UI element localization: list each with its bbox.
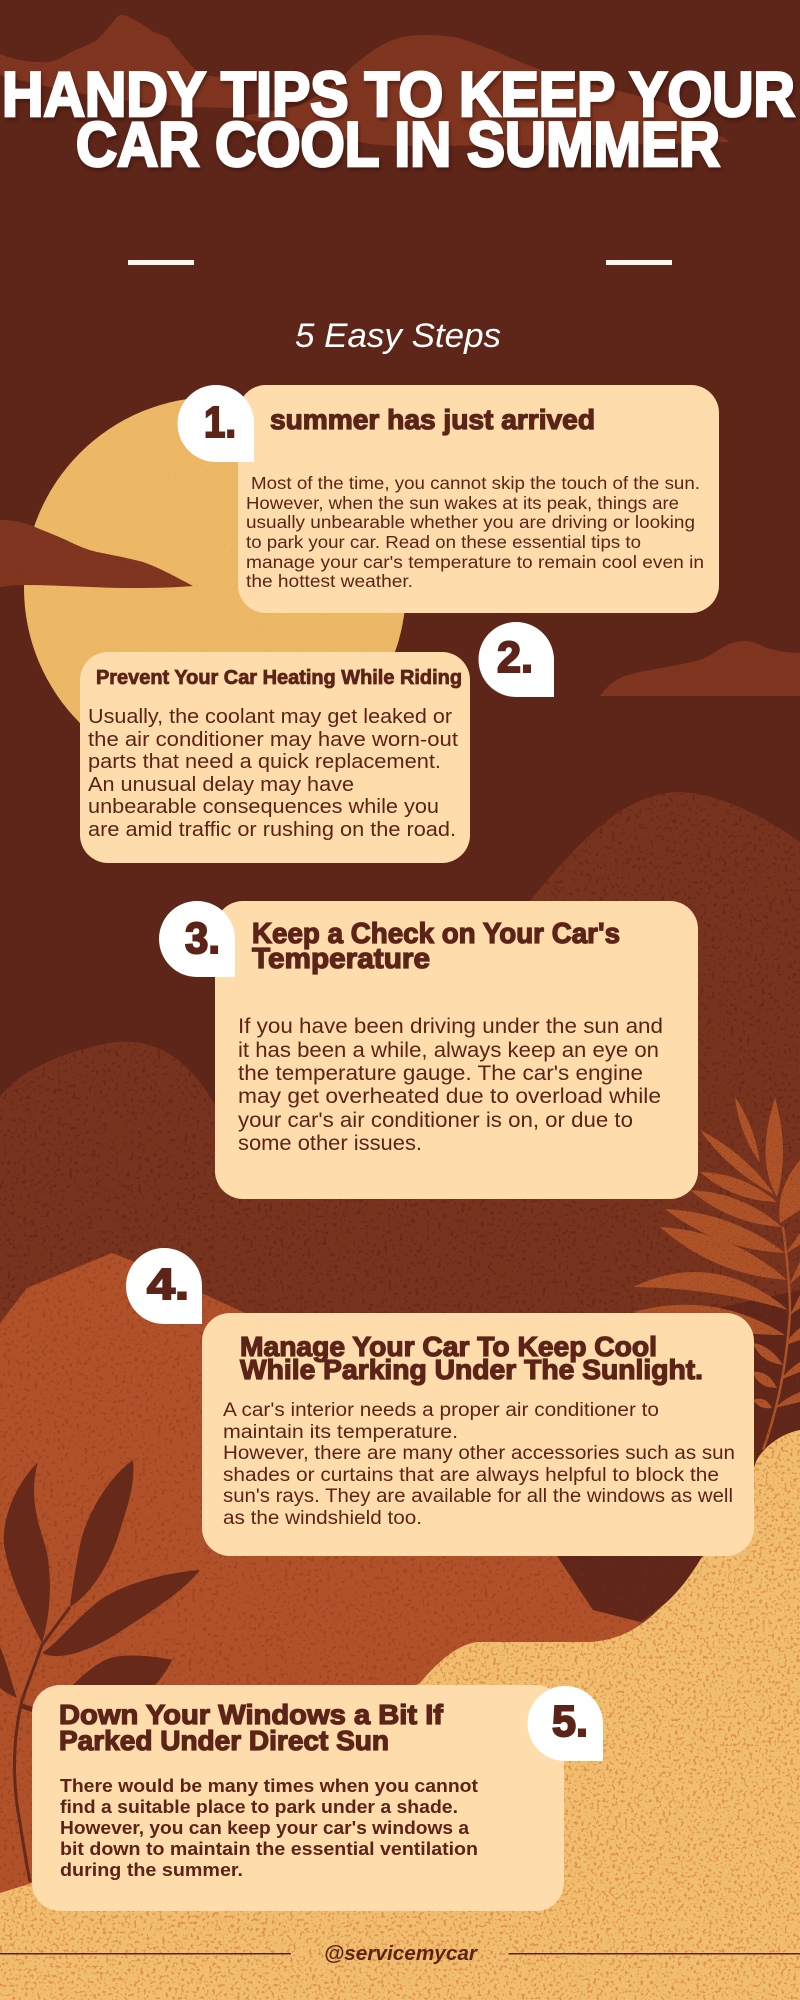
footer handle: @servicemycar — [324, 1943, 478, 1965]
body text 1: usually unbearable whether you are driving or looking — [246, 512, 695, 532]
body text 1: Most of the time, you cannot skip the touch of the sun. — [251, 473, 700, 493]
body text 4: as the windshield too. — [223, 1508, 422, 1529]
number 4: 4. — [147, 1260, 189, 1309]
sun — [24, 397, 406, 779]
body text 2: Usually, the coolant may get leaked or — [88, 706, 452, 728]
orange hill — [0, 1253, 700, 1900]
badge 5 — [528, 1686, 603, 1761]
heading 5: Parked Under Direct Sun — [59, 1725, 389, 1756]
heading 3: Temperature — [252, 943, 430, 975]
heading 5 — [59, 1699, 444, 1756]
card — [215, 901, 698, 1199]
subtitle: 5 Easy Steps — [295, 317, 501, 355]
body text 5: There would be many times when you cannot — [60, 1776, 478, 1796]
title divider right — [606, 260, 672, 265]
body text 5 — [60, 1776, 478, 1880]
heading 4: Manage Your Car To Keep Cool — [240, 1331, 657, 1362]
number 3: 3. — [185, 914, 220, 963]
sand wave — [0, 1430, 800, 2000]
body text 3: may get overheated due to overload while — [238, 1085, 661, 1108]
heading 4: While Parking Under The Sunlight. — [240, 1354, 703, 1385]
branch with dark leaves — [0, 1460, 200, 1882]
card — [238, 385, 719, 613]
mid hills — [0, 792, 800, 1700]
left mountain over sun — [0, 520, 193, 588]
badge 1 — [178, 385, 254, 462]
body text 3 — [238, 1015, 663, 1155]
number 5: 5. — [552, 1697, 588, 1746]
body text 2: the air conditioner may have worn-out — [88, 729, 458, 751]
badge 3 — [159, 901, 235, 977]
dark hill behind palm — [500, 1290, 800, 1622]
body text 5: However, you can keep your car's windows a — [60, 1818, 470, 1838]
card — [32, 1685, 564, 1911]
body text 5: bit down to maintain the essential ventilation — [60, 1839, 478, 1859]
body text 4: maintain its temperature. — [223, 1422, 458, 1443]
body text 1: However, when the sun wakes at its peak, things are — [246, 493, 679, 513]
heading 4 — [240, 1331, 703, 1385]
body text 4: However, there are many other accessories such as sun — [223, 1443, 735, 1464]
right mountain — [600, 641, 800, 696]
body text 4: A car's interior needs a proper air conditioner to — [223, 1400, 659, 1421]
body text 2: An unusual delay may have — [88, 774, 354, 796]
body text 1: the hottest weather. — [246, 571, 413, 591]
title — [2, 60, 795, 180]
body text 5: during the summer. — [60, 1860, 243, 1880]
number 1: 1. — [204, 398, 236, 447]
palm leaf — [633, 1097, 800, 1450]
heading 3 — [252, 918, 620, 975]
body text 1 — [246, 473, 704, 591]
title: CAR COOL IN SUMMER — [76, 110, 720, 180]
body text 3: your car's air conditioner is on, or due to — [238, 1109, 633, 1132]
body text 3: some other issues. — [238, 1132, 422, 1155]
card — [202, 1313, 754, 1556]
body text 5: find a suitable place to park under a shade. — [60, 1797, 458, 1817]
heading 1: summer has just arrived — [270, 404, 595, 435]
panel: step 1 — [178, 385, 719, 613]
body text 3: the temperature gauge. The car's engine — [238, 1062, 643, 1085]
footer rule right — [509, 1953, 800, 1954]
number 2: 2. — [497, 633, 533, 682]
body text 1: to park your car. Read on these essential tips to — [246, 532, 641, 552]
card — [80, 652, 470, 863]
panel: step 2 — [80, 622, 554, 863]
body text 3: If you have been driving under the sun and — [238, 1015, 663, 1038]
panel: step 5 — [32, 1685, 603, 1911]
body text 2: are amid traffic or rushing on the road. — [88, 819, 456, 841]
body text 4 — [223, 1400, 735, 1529]
body text 2: unbearable consequences while you — [88, 796, 439, 818]
body text 4: sun's rays. They are available for all the windows as well — [223, 1486, 733, 1507]
heading 5: Down Your Windows a Bit If — [59, 1699, 444, 1730]
top mountains — [0, 15, 730, 146]
panel: step 4 — [126, 1248, 754, 1556]
panel: step 3 — [159, 901, 698, 1199]
heading 3: Keep a Check on Your Car's — [252, 918, 620, 950]
body text 1: manage your car's temperature to remain cool even in — [246, 552, 704, 572]
badge 2 — [478, 622, 554, 697]
body text 4: shades or curtains that are always helpful to block the — [223, 1465, 719, 1486]
body text 3: it has been a while, always keep an eye on — [238, 1039, 659, 1062]
heading 2: Prevent Your Car Heating While Riding — [96, 667, 462, 689]
body text 2 — [88, 706, 458, 841]
title divider left — [128, 260, 194, 265]
footer rule left — [0, 1953, 291, 1954]
badge 4 — [126, 1248, 202, 1324]
body text 2: parts that need a quick replacement. — [88, 751, 441, 773]
